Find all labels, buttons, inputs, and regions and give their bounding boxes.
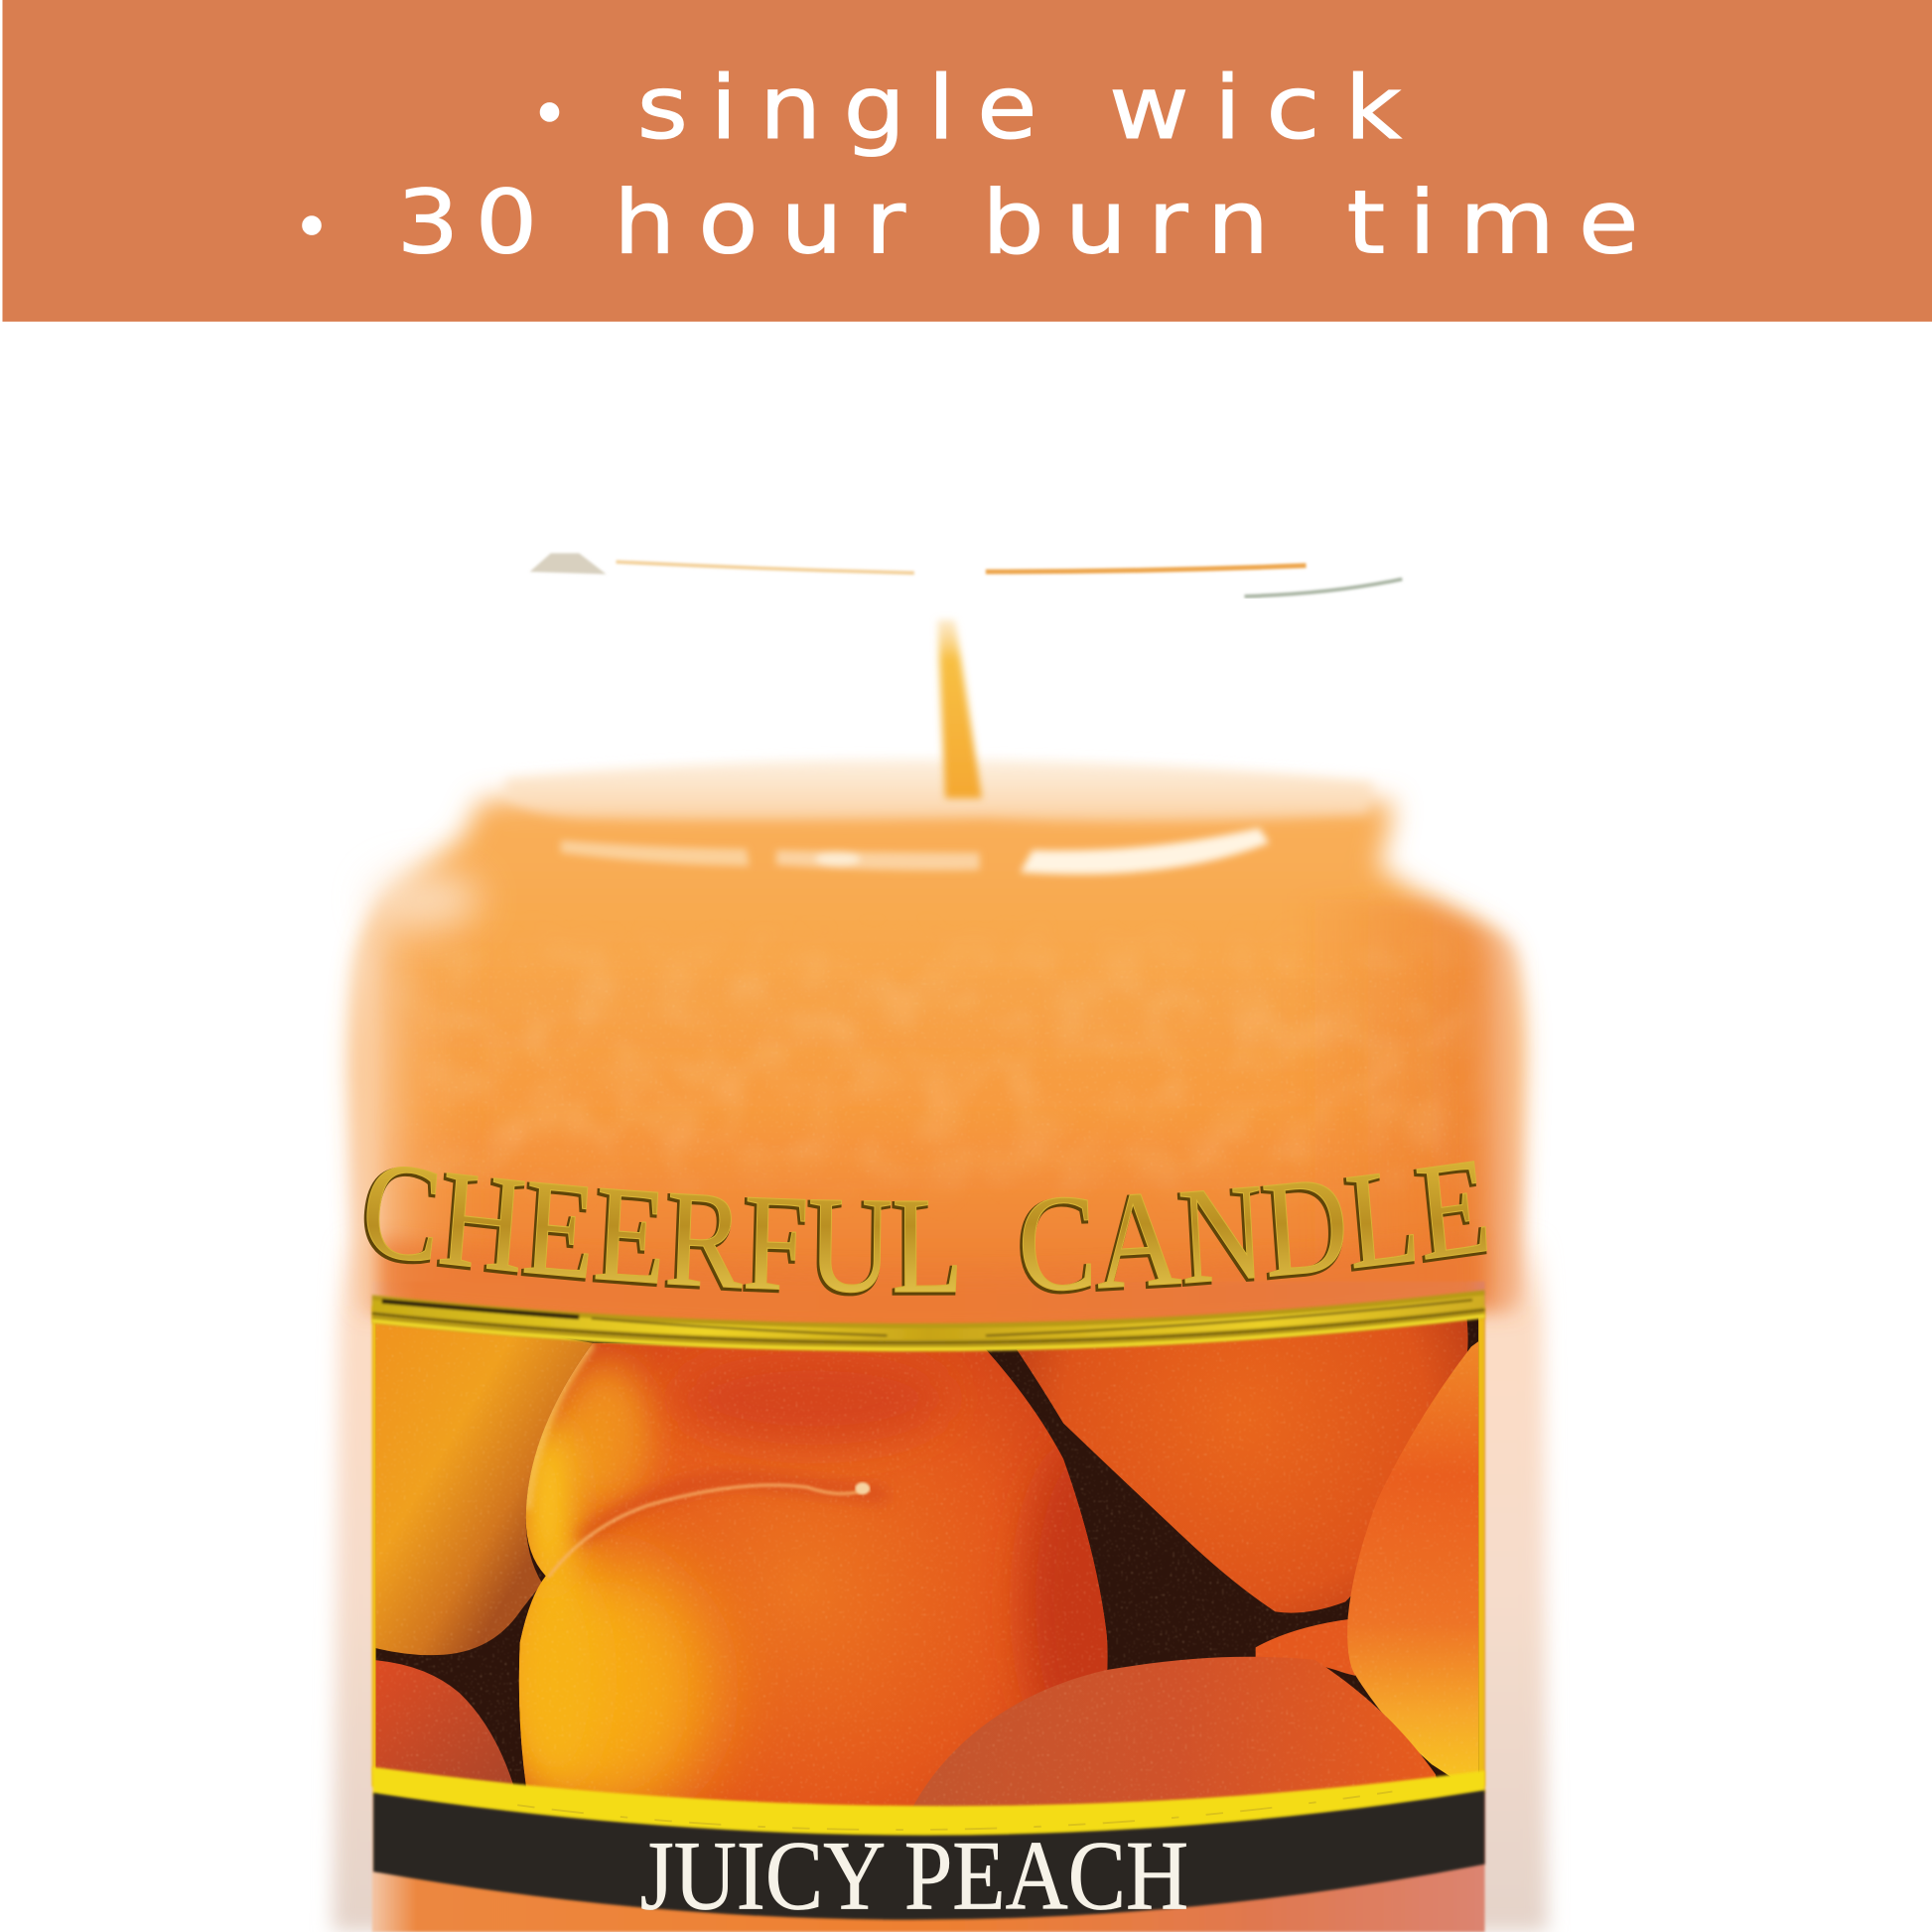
outer glass edge <box>333 1232 1548 1932</box>
main shading: red right side <box>1023 1442 1146 1762</box>
yellow band flecks <box>517 1792 1392 1830</box>
wax shoulder glow <box>369 870 481 929</box>
wax mottling <box>428 955 1463 1181</box>
peach main: crease shadow <box>579 1478 888 1540</box>
peach: bottom <box>897 1657 1453 1849</box>
main shading: orange upper side <box>554 1361 653 1509</box>
gold band top <box>372 1290 1484 1352</box>
wax shading <box>357 899 1516 1307</box>
label yellow frame <box>372 1307 1484 1787</box>
feature line: single wick: wick <box>1109 58 1402 160</box>
feature line: single wick <box>540 58 1402 160</box>
feature line: 30 hour burn time: time <box>1347 172 1639 274</box>
peach speckle <box>372 1307 1487 1849</box>
main shading: lower side core <box>518 1560 596 1789</box>
feature line: 30 hour burn time: hour <box>614 172 906 274</box>
brand name shadow <box>363 1168 1487 1297</box>
peach main: rim highlight <box>527 1343 593 1509</box>
peach main: stem dimple <box>855 1482 870 1494</box>
feature line: 30 hour burn time: 30 <box>397 172 537 274</box>
main shading: yellow upper side <box>518 1417 578 1589</box>
feature line: 30 hour burn time <box>303 172 1639 274</box>
picture shadow ground <box>375 1316 1479 1787</box>
brand name: CANDLE <box>1023 1161 1487 1291</box>
feature line: 30 hour burn time: burn <box>982 172 1269 274</box>
brand name shadow: CHEERFUL <box>363 1168 955 1297</box>
brand name <box>366 1161 1487 1293</box>
wax top surface <box>505 759 1374 822</box>
peach: top right <box>1017 1312 1468 1613</box>
peach: small middle <box>1256 1619 1355 1676</box>
candle jar <box>324 552 1557 1932</box>
wick <box>937 620 982 798</box>
peach main: crease <box>548 1485 869 1578</box>
yellow band bottom <box>372 1767 1484 1838</box>
brand name shadow: CANDLE <box>1020 1170 1487 1295</box>
meniscus highlights <box>561 828 1269 875</box>
peach: main <box>518 1342 1108 1808</box>
peach picture <box>375 1316 1479 1807</box>
label base <box>372 1282 1484 1932</box>
peach: bottom left <box>375 1660 513 1785</box>
main shading: yellow lower side <box>492 1553 715 1824</box>
wax speckle <box>427 961 1457 1172</box>
brand name: CHEERFUL <box>366 1167 957 1293</box>
glass rim <box>530 553 1402 597</box>
black name band <box>373 1790 1484 1920</box>
header banner <box>2 0 1932 322</box>
fragrance name: JUICY PEACH <box>640 1822 1188 1930</box>
label area under brand name <box>379 1238 1478 1333</box>
wax body <box>354 785 1521 1307</box>
main shading: red top <box>678 1351 949 1446</box>
peach: right <box>1347 1337 1484 1799</box>
peach: top left <box>363 1307 593 1655</box>
feature line: single wick: single <box>637 58 1037 160</box>
